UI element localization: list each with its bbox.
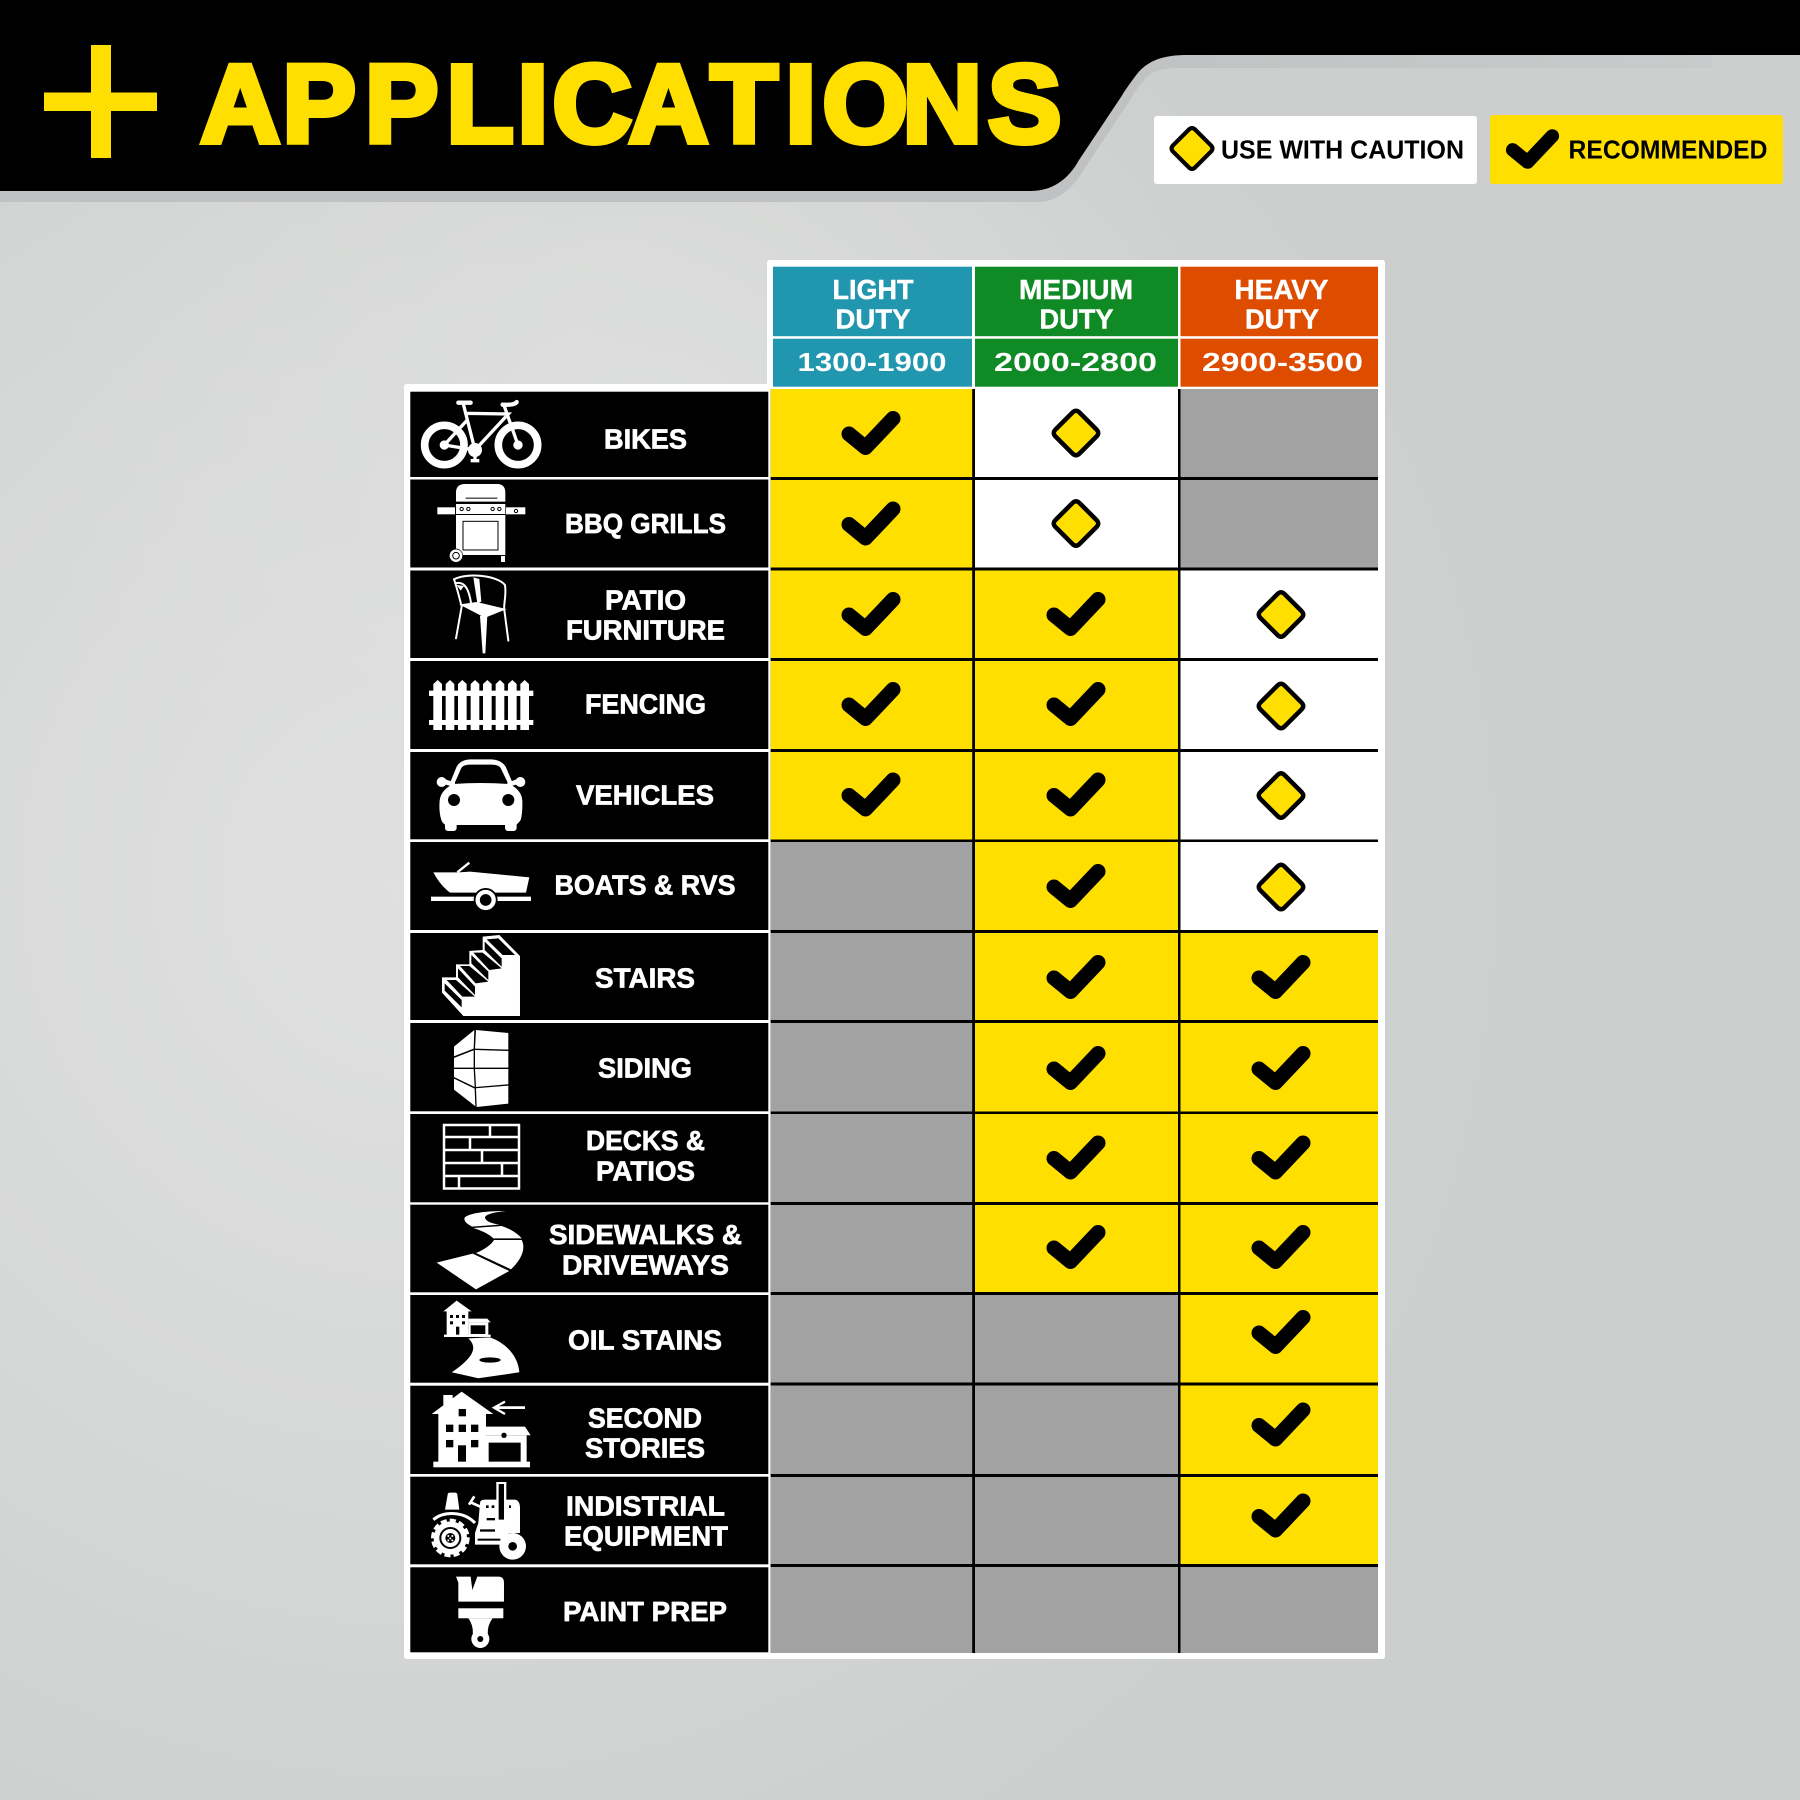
cell: light recommended — [771, 389, 972, 477]
icon: tractor — [433, 1482, 526, 1560]
icon: plus — [44, 45, 157, 158]
label line 1: SECOND — [588, 1402, 702, 1434]
heading text line 2: DUTY — [836, 304, 910, 334]
icon: fence — [429, 680, 533, 730]
cell: heavy recommended — [1180, 1477, 1378, 1564]
cell: heavy caution — [1180, 842, 1378, 930]
legend text: USE WITH CAUTION — [1221, 134, 1464, 164]
cell: medium not recommended — [975, 1295, 1178, 1382]
icon: caution diamond — [1172, 128, 1212, 169]
label: STAIRS — [595, 962, 695, 994]
icon: bike — [425, 402, 538, 465]
label line 2: FURNITURE — [566, 614, 725, 646]
cell: heavy not recommended — [1180, 480, 1378, 568]
cell: medium recommended — [975, 933, 1178, 1020]
row: stairs — [410, 933, 1378, 1020]
cell: light not recommended — [771, 1023, 972, 1112]
row: decks and patios — [410, 1114, 1378, 1202]
icon: bbq grill — [437, 484, 525, 562]
cell: medium recommended — [975, 1205, 1178, 1292]
heading text: MEDIUM — [1019, 274, 1133, 305]
row: fencing — [410, 661, 1378, 749]
label: PAINT PREP — [563, 1596, 727, 1627]
label line 1: DECKS & — [586, 1125, 705, 1156]
label line 1: PATIO — [605, 584, 686, 616]
legend: recommended — [1490, 115, 1783, 184]
label line 1: INDISTRIAL — [566, 1490, 725, 1522]
header banner — [0, 0, 1800, 202]
cell: light not recommended — [771, 933, 972, 1020]
label: FENCING — [585, 688, 706, 720]
cell: light not recommended — [771, 1567, 972, 1653]
cell: medium not recommended — [975, 1386, 1178, 1474]
cell: heavy recommended — [1180, 1386, 1378, 1474]
label: BIKES — [604, 424, 687, 454]
icon: house and driveway with stain — [443, 1301, 519, 1378]
cell: heavy recommended — [1180, 1114, 1378, 1202]
heading text line 2: DUTY — [1245, 304, 1319, 334]
label: SIDING — [598, 1052, 692, 1084]
cell: heavy not recommended — [1180, 1567, 1378, 1653]
pressure range: 2000-2800 — [994, 347, 1157, 377]
icon: boat on trailer — [431, 863, 531, 912]
row: boats and rvs — [410, 842, 1378, 930]
icon: winding path — [437, 1211, 523, 1289]
column header: light duty — [773, 267, 972, 387]
cell: light recommended — [771, 752, 972, 840]
label line 2: PATIOS — [596, 1156, 695, 1186]
cell: medium recommended — [975, 752, 1178, 840]
row: bikes — [410, 389, 1378, 477]
cell: light not recommended — [771, 842, 972, 930]
legend text: RECOMMENDED — [1568, 134, 1768, 164]
cell: heavy not recommended — [1180, 389, 1378, 477]
cell: medium recommended — [975, 1023, 1178, 1112]
row: sidewalks and driveways — [410, 1205, 1378, 1292]
banner shadow — [0, 0, 1712, 202]
row: bbq grills — [410, 480, 1378, 568]
cell: medium caution — [975, 389, 1178, 477]
pressure range: 2900-3500 — [1202, 347, 1363, 377]
heading text: HEAVY — [1234, 274, 1328, 305]
cell: light not recommended — [771, 1114, 972, 1202]
panel: white table frame — [404, 260, 1385, 1659]
icon: bricks — [444, 1125, 519, 1188]
cell: light not recommended — [771, 1205, 972, 1292]
cell: heavy caution — [1180, 752, 1378, 840]
label line 2: STORIES — [585, 1432, 705, 1464]
cell: light recommended — [771, 570, 972, 658]
cell: heavy recommended — [1180, 1023, 1378, 1112]
label: BBQ GRILLS — [565, 508, 726, 539]
label line 1: SIDEWALKS & — [549, 1219, 742, 1250]
cell: heavy recommended — [1180, 933, 1378, 1020]
row: patio furniture — [410, 570, 1378, 658]
icon: car — [437, 759, 525, 831]
icon: siding — [454, 1030, 508, 1107]
cell: heavy recommended — [1180, 1295, 1378, 1382]
cell: light recommended — [771, 480, 972, 568]
cell: medium not recommended — [975, 1477, 1178, 1564]
grid backing — [771, 389, 1378, 1653]
cell: light recommended — [771, 661, 972, 749]
label: VEHICLES — [576, 780, 714, 810]
title: APPLICATIONS — [200, 43, 1061, 166]
heading text: LIGHT — [832, 274, 914, 305]
cell: medium recommended — [975, 570, 1178, 658]
cell: light not recommended — [771, 1386, 972, 1474]
icon: paint brush — [456, 1577, 504, 1648]
icon: stairs — [442, 935, 520, 1016]
label: OIL STAINS — [568, 1324, 722, 1356]
cell: medium recommended — [975, 661, 1178, 749]
icon: check — [1513, 136, 1552, 162]
label line 2: DRIVEWAYS — [562, 1250, 729, 1280]
row: second stories — [410, 1386, 1378, 1474]
cell: medium caution — [975, 480, 1178, 568]
cell: medium not recommended — [975, 1567, 1178, 1653]
column header: medium duty — [975, 267, 1178, 387]
row: siding — [410, 1023, 1378, 1112]
legend: use with caution — [1154, 116, 1477, 184]
row: vehicles — [410, 752, 1378, 840]
column header: heavy duty — [1180, 267, 1378, 387]
row: industrial equipment — [410, 1477, 1378, 1564]
icon: chair — [454, 576, 508, 653]
banner black shape — [0, 0, 1800, 191]
cell: heavy caution — [1180, 570, 1378, 658]
cell: light not recommended — [771, 1477, 972, 1564]
cell: medium recommended — [975, 1114, 1178, 1202]
label: BOATS & RVS — [554, 870, 736, 900]
row: paint prep — [410, 1567, 1378, 1653]
cell: heavy recommended — [1180, 1205, 1378, 1292]
cell: heavy caution — [1180, 661, 1378, 749]
cell: light not recommended — [771, 1295, 972, 1382]
label line 2: EQUIPMENT — [564, 1520, 728, 1552]
cell: medium recommended — [975, 842, 1178, 930]
heading text line 2: DUTY — [1040, 304, 1114, 334]
pressure range: 1300-1900 — [798, 347, 946, 377]
icon: house with arrow — [432, 1392, 531, 1467]
row: oil stains — [410, 1295, 1378, 1383]
